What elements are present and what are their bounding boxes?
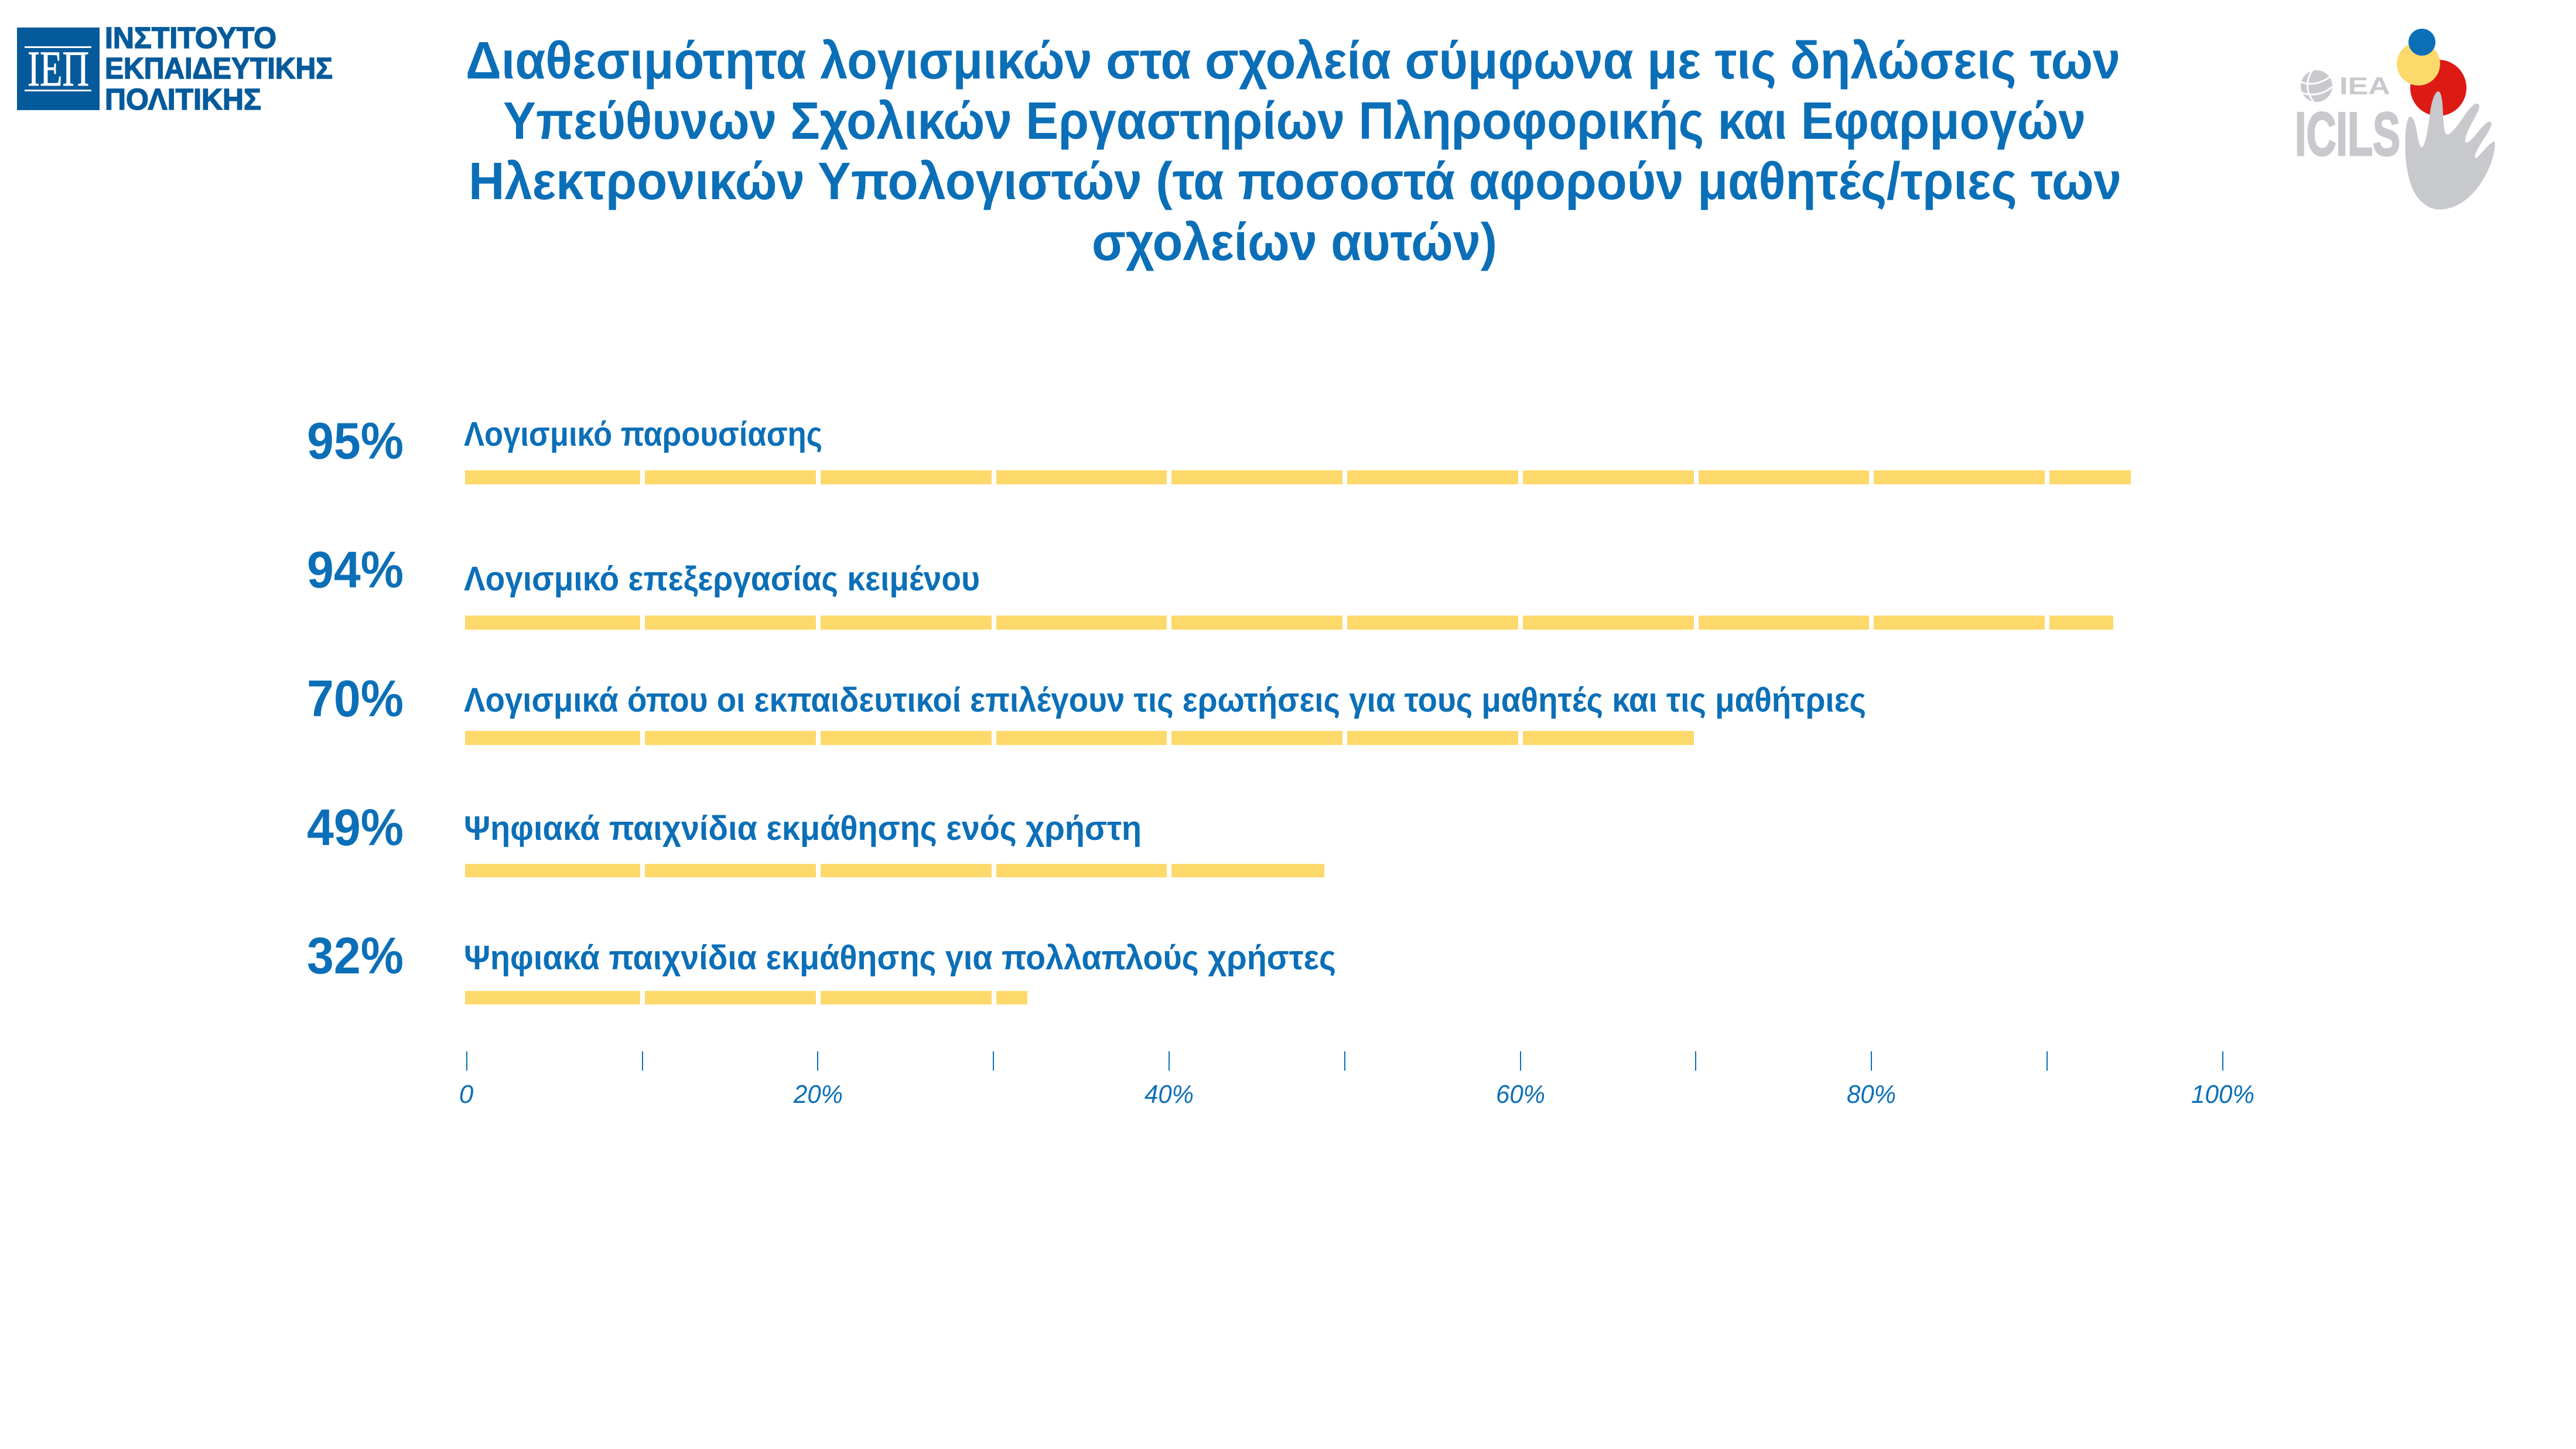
title: Υπεύθυνων Σχολικών Εργαστηρίων Πληροφορικής και Εφαρμογών bbox=[503, 92, 2086, 151]
IEA wordmark: IEA bbox=[2339, 72, 2390, 100]
icon: blue circle bbox=[2408, 29, 2435, 56]
icon: hand bbox=[2406, 91, 2495, 210]
axis labels: 100% bbox=[2191, 1080, 2254, 1109]
ICILS wordmark: ICILS bbox=[2295, 100, 2400, 169]
value 95%: 95% bbox=[307, 412, 404, 470]
axis labels: 0 bbox=[459, 1080, 474, 1109]
axis labels bbox=[459, 1080, 2254, 1109]
logo wordmark: ΙΝΣΤΙΤΟΥΤΟ bbox=[105, 21, 276, 54]
logo square emblem: ΙΕΠ bbox=[28, 40, 89, 97]
bar 94% bbox=[465, 616, 2113, 630]
title: σχολείων αυτών) bbox=[1092, 213, 1497, 272]
icon: IEA globe bbox=[2301, 70, 2332, 102]
axis labels: 60% bbox=[1496, 1080, 1545, 1109]
axis labels: 80% bbox=[1847, 1080, 1896, 1109]
axis labels: 40% bbox=[1144, 1080, 1194, 1109]
logo wordmark bbox=[105, 21, 333, 116]
value 32%: 32% bbox=[307, 927, 404, 985]
bar 32% bbox=[465, 991, 1027, 1004]
logo wordmark: ΕΚΠΑΙΔΕΥΤΙΚΗΣ bbox=[105, 52, 333, 85]
bar 49% bbox=[465, 864, 1324, 877]
bar 70% bbox=[465, 731, 1694, 745]
label: Ψηφιακά παιχνίδια εκμάθησης ενός χρήστη bbox=[464, 809, 1142, 847]
axis labels: 20% bbox=[793, 1080, 843, 1109]
value 94%: 94% bbox=[307, 541, 404, 599]
label: Λογισμικό παρουσίασης bbox=[464, 415, 822, 453]
bar row: multi-user learning games 32% bbox=[307, 927, 1336, 998]
icon: red circle bbox=[2410, 60, 2466, 116]
bar row: single-user learning games 49% bbox=[307, 798, 1324, 870]
bar 95% bbox=[465, 470, 2131, 484]
logo wordmark: ΠΟΛΙΤΙΚΗΣ bbox=[105, 83, 261, 116]
title bbox=[466, 32, 2121, 272]
axis bbox=[459, 1051, 2254, 1109]
title: Διαθεσιμότητα λογισμικών στα σχολεία σύμφωνα με τις δηλώσεις των bbox=[466, 32, 2120, 90]
label: Ψηφιακά παιχνίδια εκμάθησης για πολλαπλούς χρήστες bbox=[464, 939, 1336, 977]
logo: Institute of Educational Policy bbox=[17, 21, 333, 116]
value 70%: 70% bbox=[307, 669, 404, 727]
title: Ηλεκτρονικών Υπολογιστών (τα ποσοστά αφορούν μαθητές/τριες των bbox=[469, 152, 2121, 211]
logo square emblem bbox=[17, 28, 100, 110]
value 49%: 49% bbox=[307, 798, 404, 856]
bar row: teacher-selected question software 70% bbox=[307, 669, 1866, 738]
icon: yellow circle bbox=[2397, 42, 2440, 86]
label: Λογισμικά όπου οι εκπαιδευτικοί επιλέγουν τις ερωτήσεις για τους μαθητές και τις μαθήτριες bbox=[464, 681, 1866, 719]
axis ticks bbox=[467, 1051, 2223, 1071]
bar row: word processing software 94% bbox=[307, 541, 2113, 623]
bar row: presentation software 95% bbox=[307, 412, 2131, 477]
label: Λογισμικό επεξεργασίας κειμένου bbox=[464, 560, 980, 598]
logo: IEA ICILS bbox=[2295, 29, 2495, 210]
